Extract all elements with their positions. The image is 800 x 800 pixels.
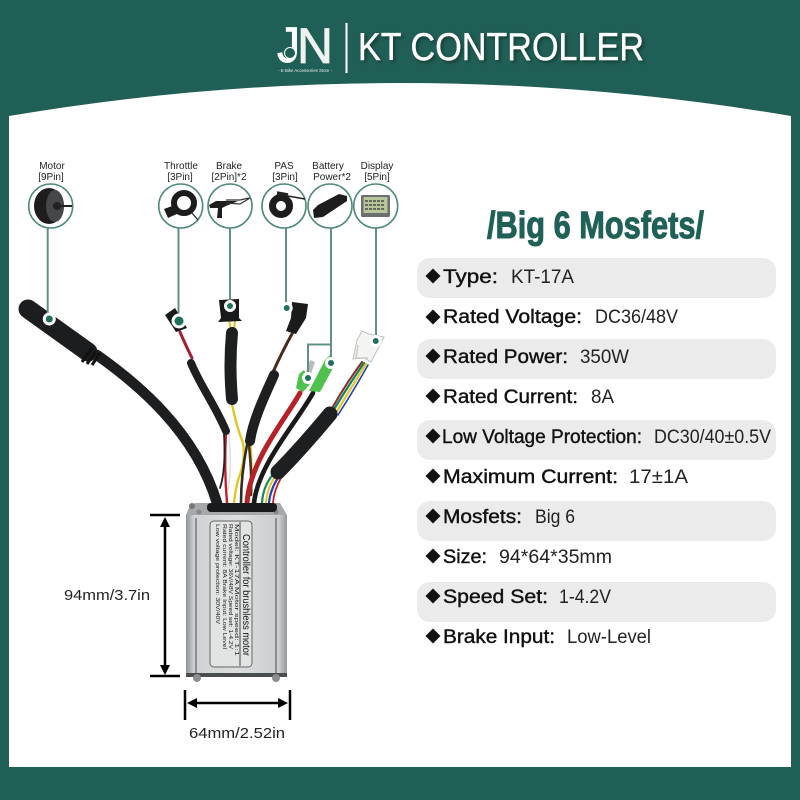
controller label: Rated current: 8A Brake Input: Low Level [221,524,227,649]
row: speed set: Speed Set: [443,587,548,608]
dimension: height: 94mm/3.7in [64,588,150,604]
connector labels: Display [361,161,393,172]
dimension: width [185,690,290,742]
aluminium case [186,515,287,677]
row: mosfets: Mosfets: [443,507,522,528]
row: low voltage protection [442,427,771,448]
icon: display [354,184,398,228]
row: maximum current: Maximum Current: [443,467,618,488]
row: brake input: Brake Input: [443,627,555,648]
row: rated current: Rated Current: [443,387,578,408]
row: rated voltage: Rated Voltage: [443,307,582,328]
dimension: width: 64mm/2.52in [189,726,285,742]
row: rated power: 350W [580,347,629,368]
row: type: KT-17A [511,267,574,288]
row: speed set [443,587,611,608]
connector labels: Battery [312,161,344,172]
dimension: height [64,515,180,676]
row: size: 94*64*35mm [499,547,612,568]
controller label: Low voltage protection: 30V/40V [214,524,220,625]
row: rated power [443,347,629,368]
controller label: Model: KT-17A Motor speed: 1:1 [233,524,239,656]
row: maximum current: 17±1A [629,467,688,488]
controller body [186,503,287,682]
heading: Big 6 Mosfets: /Big 6 Mosfets/ [487,205,704,247]
row: size: Size: [443,547,487,568]
icon: throttle [159,184,203,228]
leader lines [48,228,376,374]
row: rated voltage [443,307,678,328]
row: rated current: 8A [591,387,614,408]
diamonds [426,268,440,644]
motor cable [97,355,217,503]
connector dots [44,302,380,382]
connector labels: Brake [216,161,242,172]
connector labels: [3Pin] [167,172,193,183]
thin wires [225,432,227,503]
icon: battery [308,184,352,228]
motor connector [28,309,100,365]
row: low voltage protection: DC30/40±0.5V [654,427,771,448]
PAS connector [286,302,308,334]
title: KT CONTROLLER [358,26,644,69]
connector labels: Power*2 [313,172,351,183]
logo: N [297,18,333,74]
display connector [353,331,384,362]
red battery lead [247,393,300,503]
row: rated power: Rated Power: [443,347,568,368]
controller label [210,521,252,667]
row: type: Type: [443,267,498,288]
connector labels: [3Pin] [272,172,298,183]
connector labels: Throttle [164,161,198,172]
icon: brake [208,184,252,228]
row: brake input: Low-Level [567,627,651,648]
wiring harness [97,320,368,503]
row backgrounds [417,258,776,622]
connector labels: PAS [274,161,294,172]
throttle connector [165,308,187,332]
sleeves [191,363,226,431]
row: mosfets: Big 6 [535,507,575,528]
row: size [443,547,612,568]
row: low voltage protection: Low Voltage Protection: [442,427,642,448]
connector labels: [9Pin] [38,172,64,183]
brake connector [218,299,242,322]
connector labels: [2Pin]*2 [211,172,247,183]
row: speed set: 1-4.2V [559,587,611,608]
row: rated voltage: DC36/48V [595,307,678,328]
row: brake input [443,627,651,648]
row: maximum current [443,467,688,488]
row: mosfets [443,507,575,528]
black battery lead [254,393,313,503]
icon: PAS sensor [262,184,306,228]
header [277,17,644,74]
row: type [443,267,574,288]
battery connectors [296,354,333,392]
controller label: Rated voltage: 36V/48V Speed set: 1-4.2V [227,524,233,650]
icon: motor [29,184,73,228]
connector labels [38,161,393,183]
spec list [417,258,776,648]
connector labels: Motor [39,161,65,172]
top plate [186,503,287,515]
connector labels: [5Pin] [364,172,390,183]
logo [277,17,333,74]
logo: J [277,17,300,73]
controller label: Controller for brushless motor [240,534,252,656]
logo: - E-Bike Accessories Store - [278,68,332,73]
